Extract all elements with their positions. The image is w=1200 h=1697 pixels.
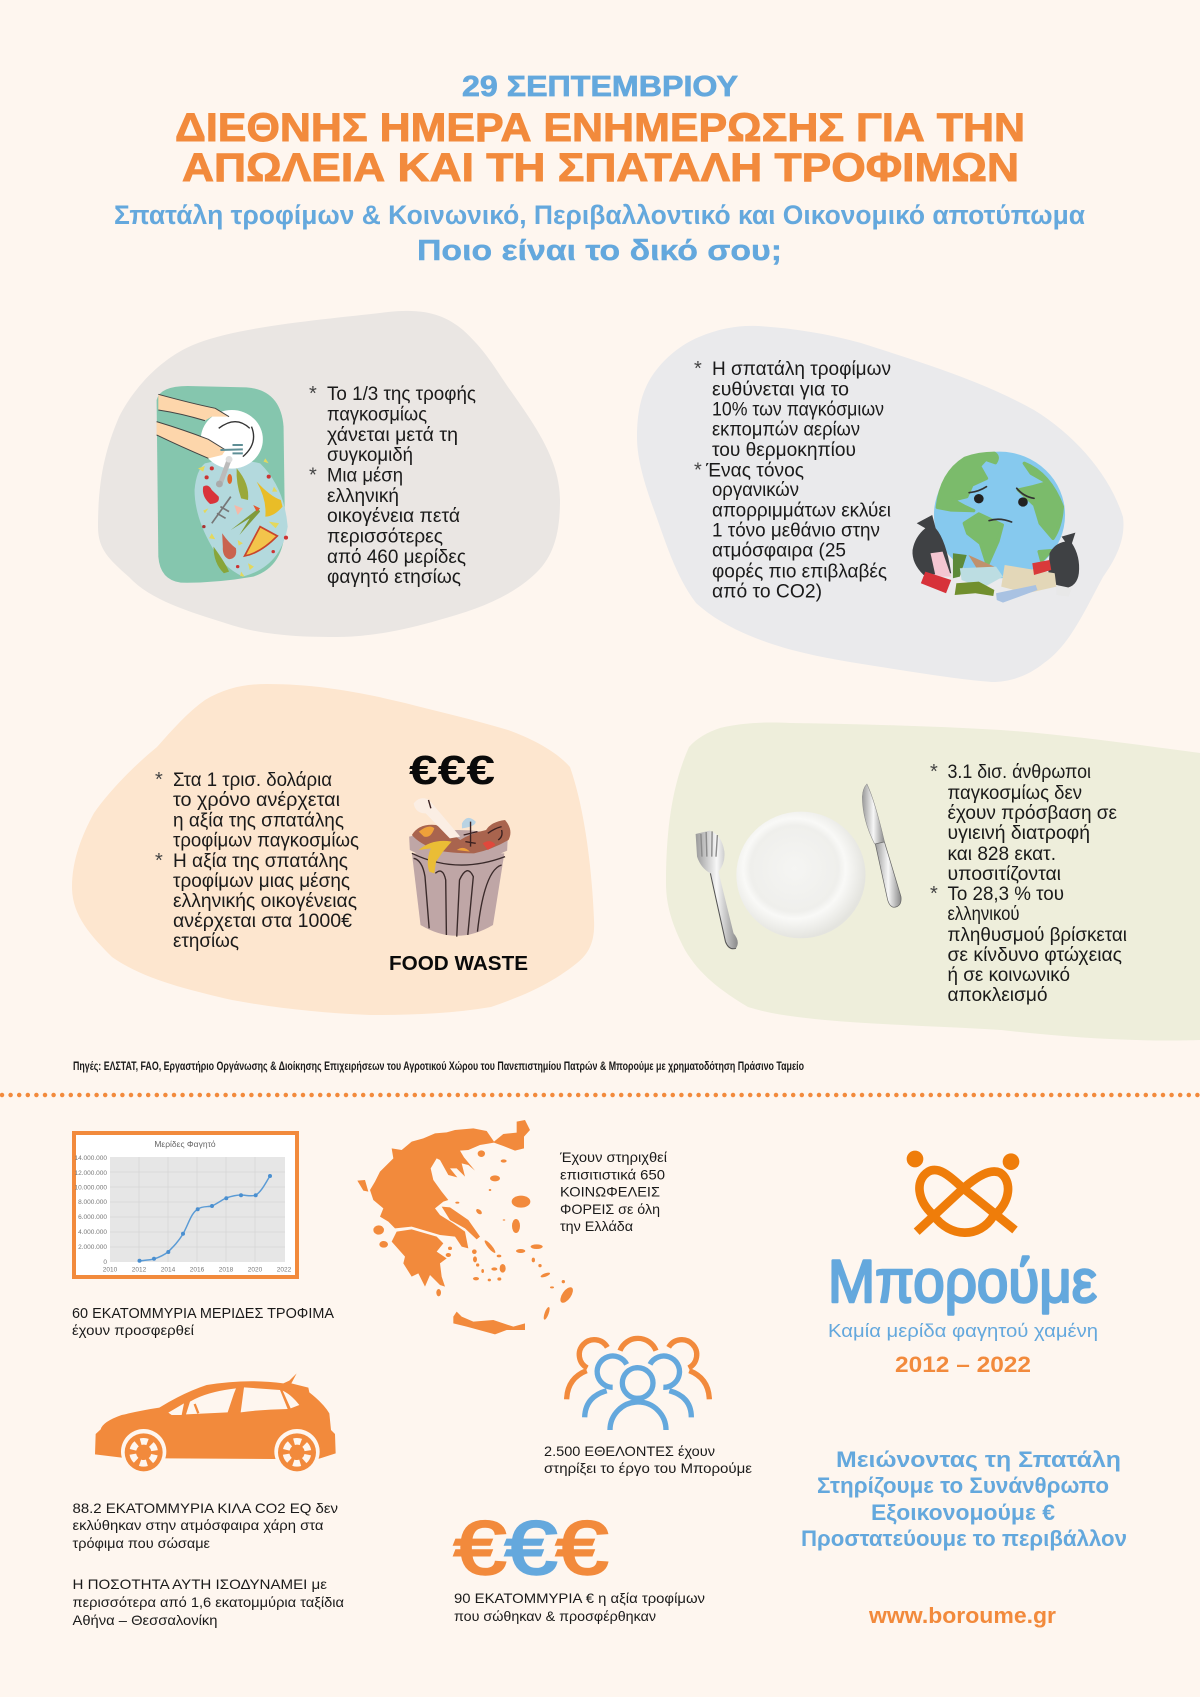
line chart: meals per year: 2.000.000 xyxy=(78,1244,107,1251)
text: food access facts: πληθυσμού βρίσκεται xyxy=(948,924,1127,946)
line chart: meals per year: 10.000.000 xyxy=(74,1184,107,1192)
text: 2500 volunteers: στηρίξει το έργο του Μπορούμε xyxy=(544,1460,752,1476)
icon: plate with fork and knife xyxy=(696,784,901,949)
text: 2500 volunteers: 2.500 ΕΘΕΛΟΝΤΕΣ έχουν xyxy=(544,1443,715,1459)
text: equivalent trips: Αθήνα – Θεσσαλονίκη xyxy=(72,1612,218,1628)
icon: black euro signs: €€€ xyxy=(409,747,495,793)
panel: harvest loss xyxy=(98,311,560,637)
text: cost facts: το χρόνο ανέρχεται xyxy=(173,789,340,811)
text: emissions facts: * xyxy=(694,460,702,482)
text: harvest loss facts: Το 1/3 της τροφής xyxy=(327,383,476,405)
slogans: Προστατεύουμε το περιβάλλον xyxy=(801,1526,1127,1551)
blob background xyxy=(72,684,594,1015)
slogans: Εξοικονομούμε € xyxy=(871,1500,1055,1525)
text: cost facts: τροφίμων παγκοσμίως xyxy=(173,830,359,852)
text: harvest loss facts: οικογένεια πετά xyxy=(327,505,460,527)
text: emissions facts: ατμόσφαιρα (25 xyxy=(712,540,846,562)
line chart: meals per year xyxy=(74,1133,297,1277)
line chart: meals per year: 6.000.000 xyxy=(78,1214,107,1221)
text: emissions facts: * xyxy=(694,358,702,380)
line chart: meals per year: Μερίδες Φαγητό xyxy=(154,1139,216,1149)
text: cost facts: Η αξία της σπατάλης xyxy=(173,850,348,872)
main title line 1: ΔΙΕΘΝΗΣ ΗΜΕΡΑ ΕΝΗΜΕΡΩΣΗΣ ΓΙΑ ΤΗΝ xyxy=(175,106,1025,150)
website: www.boroume.gr xyxy=(868,1603,1056,1628)
question: Ποιο είναι το δικό σου; xyxy=(417,235,782,267)
text: 60 million meals xyxy=(72,1305,334,1338)
panel: meals chart xyxy=(72,1133,334,1338)
text: emissions facts xyxy=(694,358,891,602)
text: harvest loss facts: * xyxy=(309,464,317,486)
icon: three euro signs: € xyxy=(505,1506,557,1590)
blob background xyxy=(666,723,1200,1041)
text: cost facts: * xyxy=(155,850,163,872)
text: harvest loss facts: ελληνική xyxy=(327,485,399,507)
text: equivalent trips: Η ΠΟΣΟΤΗΤΑ ΑΥΤΗ ΙΣΟΔΥΝΑΜΕΙ με xyxy=(72,1576,327,1592)
panel: emissions xyxy=(637,326,1123,682)
text: food access facts xyxy=(930,761,1127,1006)
text: food access facts: έχουν πρόσβαση σε xyxy=(948,802,1117,824)
line chart: meals per year: 4.000.000 xyxy=(78,1229,107,1236)
text: emissions facts: Ένας τόνος xyxy=(705,460,804,482)
text: food access facts: 3.1 δισ. άνθρωποι xyxy=(948,761,1091,783)
line chart: meals per year: 14.000.000 xyxy=(74,1155,107,1162)
text: CO2 saved xyxy=(72,1500,338,1551)
title block xyxy=(114,71,1085,267)
slogans: Στηρίζουμε το Συνάνθρωπο xyxy=(817,1473,1109,1498)
panel: map of Greece xyxy=(357,1120,667,1334)
text: 90 million euros: που σώθηκαν & προσφέρθηκαν xyxy=(454,1608,656,1624)
text: food access facts: αποκλεισμό xyxy=(948,984,1048,1006)
text: cost facts: ανέρχεται στα 1000€ xyxy=(173,910,352,932)
line chart: meals per year: 2012 xyxy=(132,1266,147,1274)
logo wordmark: Μπορούμε xyxy=(828,1248,1097,1315)
text: food access facts: Το 28,3 % του xyxy=(948,883,1064,905)
text: emissions facts: Η σπατάλη τροφίμων xyxy=(712,358,891,380)
text: harvest loss facts: χάνεται μετά τη xyxy=(327,424,458,446)
text: cost facts: ελληνικής οικογένειας xyxy=(173,890,357,912)
text: food access facts: και 828 εκατ. xyxy=(948,843,1056,865)
icon: sad earth with trash xyxy=(912,452,1079,603)
text: CO2 saved: τρόφιμα που σώσαμε xyxy=(72,1535,210,1551)
blob background xyxy=(637,326,1123,682)
text: emissions facts: φορές πιο επιβλαβές xyxy=(712,560,887,582)
text: 2500 volunteers xyxy=(544,1443,752,1476)
text: 60 million meals: 60 ΕΚΑΤΟΜΜΥΡΙΑ ΜΕΡΙΔΕΣ ΤΡΟΦΙΜΑ xyxy=(72,1305,334,1322)
line chart: meals per year: 2016 xyxy=(190,1266,205,1274)
text: cost facts: τροφίμων μιας μέσης xyxy=(173,870,350,892)
text: harvest loss facts: φαγητό ετησίως xyxy=(327,566,461,588)
panel: volunteers xyxy=(544,1338,752,1476)
line chart: meals per year: 2010 xyxy=(103,1266,118,1274)
text: cost facts: * xyxy=(155,769,163,791)
line chart: meals per year: 2022 xyxy=(277,1266,292,1274)
text: 650 organisations: την Ελλάδα xyxy=(560,1218,633,1234)
line chart: meals per year: 2020 xyxy=(248,1266,263,1274)
text: harvest loss facts: Μια μέση xyxy=(327,464,403,486)
subtitle: Σπατάλη τροφίμων & Κοινωνικό, Περιβαλλοντικό και Οικονομικό αποτύπωμα xyxy=(114,200,1085,230)
panel: CO2 car xyxy=(72,1373,344,1628)
text: 650 organisations: ΚΟΙΝΩΦΕΛΕΙΣ xyxy=(560,1184,660,1200)
text: cost facts: Στα 1 τρισ. δολάρια xyxy=(173,769,332,791)
sources line: Πηγές: ΕΛΣΤΑΤ, FAO, Εργαστήριο Οργάνωσης & Διοίκησης Επιχειρήσεων του Αγροτικού Χώρου του Πανεπιστημίου Πατρών & Μπορούμε με χρηματοδότηση Πράσινο Ταμείο xyxy=(73,1061,804,1073)
slogans xyxy=(801,1447,1127,1551)
text: cost facts: ετησίως xyxy=(173,930,239,952)
line chart: meals per year: 8.000.000 xyxy=(78,1199,107,1206)
line chart: meals per year: 2018 xyxy=(219,1266,234,1274)
blob background xyxy=(98,311,560,637)
label: food waste: FOOD WASTE xyxy=(389,953,528,975)
icon: three euro signs xyxy=(454,1506,608,1590)
text: food access facts: υγιεινή διατροφή xyxy=(948,822,1090,844)
text: harvest loss facts: περισσότερες xyxy=(327,526,443,548)
slogans: Μειώνοντας τη Σπατάλη xyxy=(836,1447,1121,1472)
text: CO2 saved: 88.2 ΕΚΑΤΟΜΜΥΡΙΑ ΚΙΛΑ CO2 EQ δεν xyxy=(72,1500,338,1516)
text: food access facts: * xyxy=(930,761,938,783)
date heading: 29 ΣΕΠΤΕΜΒΡΙΟΥ xyxy=(462,71,738,103)
text: food access facts: ή σε κοινωνικό xyxy=(948,964,1070,986)
text: 650 organisations xyxy=(559,1149,667,1234)
text: emissions facts: 1 τόνο μεθάνιο στην xyxy=(712,520,880,542)
years: 2012 – 2022 xyxy=(895,1352,1031,1377)
line chart: meals per year: 0 xyxy=(103,1259,107,1266)
text: 650 organisations: επισιτιστικά 650 xyxy=(560,1166,665,1182)
text: 650 organisations: Έχουν στηριχθεί xyxy=(559,1149,667,1165)
text: emissions facts: ευθύνεται για το xyxy=(712,378,849,400)
panel: Boroume logo xyxy=(828,1151,1098,1377)
text: 90 million euros xyxy=(454,1590,705,1624)
logo tagline: Καμία μερίδα φαγητού χαμένη xyxy=(828,1321,1098,1341)
text: CO2 saved: εκλύθηκαν στην ατμόσφαιρα χάρη στα xyxy=(72,1517,324,1533)
text: harvest loss facts: * xyxy=(309,383,317,405)
text: cost facts: η αξία της σπατάλης xyxy=(173,810,344,832)
icon: pretzel logo xyxy=(907,1151,1019,1233)
line chart: meals per year: 12.000.000 xyxy=(74,1170,107,1177)
text: 60 million meals: έχουν προσφερθεί xyxy=(72,1322,194,1338)
panel: food access xyxy=(666,723,1200,1041)
text: emissions facts: εκπομπών αερίων xyxy=(712,419,860,441)
text: harvest loss facts xyxy=(309,383,476,588)
text: harvest loss facts: παγκοσμίως xyxy=(327,404,427,426)
text: food access facts: παγκοσμίως δεν xyxy=(948,782,1082,804)
icon: orange car xyxy=(95,1373,336,1474)
text: equivalent trips: περισσότερα από 1,6 εκατομμύρια ταξίδια xyxy=(72,1594,344,1610)
panel: economic cost xyxy=(72,684,594,1015)
line chart: meals per year: 2014 xyxy=(161,1266,176,1274)
map: Greece xyxy=(357,1120,575,1334)
text: harvest loss facts: από 460 μερίδες xyxy=(327,546,466,568)
text: harvest loss facts: συγκομιδή xyxy=(327,444,413,466)
icon: three euro signs: € xyxy=(454,1506,506,1590)
text: equivalent trips xyxy=(72,1576,344,1628)
text: emissions facts: απορριμμάτων εκλύει xyxy=(712,500,891,522)
text: emissions facts: από το CO2) xyxy=(712,580,822,602)
text: 650 organisations: ΦΟΡΕΙΣ σε όλη xyxy=(560,1201,660,1217)
icon: food waste bin xyxy=(409,798,510,937)
text: food access facts: σε κίνδυνο φτώχειας xyxy=(948,944,1122,966)
icon: plate scraped into waste xyxy=(157,386,288,583)
icon: group of people xyxy=(567,1338,709,1430)
text: emissions facts: οργανικών xyxy=(712,479,799,501)
panel: value saved xyxy=(454,1506,705,1624)
text: cost facts xyxy=(155,769,359,952)
text: food access facts: * xyxy=(930,883,938,905)
icon: three euro signs: € xyxy=(556,1506,608,1590)
text: emissions facts: του θερμοκηπίου xyxy=(712,439,856,461)
main title line 2: ΑΠΩΛΕΙΑ ΚΑΙ ΤΗ ΣΠΑΤΑΛΗ ΤΡΟΦΙΜΩΝ xyxy=(182,146,1019,190)
text: food access facts: υποσιτίζονται xyxy=(948,863,1061,885)
text: food access facts: ελληνικού xyxy=(948,903,1020,925)
text: emissions facts: 10% των παγκόσμιων xyxy=(712,398,884,420)
text: 90 million euros: 90 ΕΚΑΤΟΜΜΥΡΙΑ € η αξία τροφίμων xyxy=(454,1590,705,1606)
